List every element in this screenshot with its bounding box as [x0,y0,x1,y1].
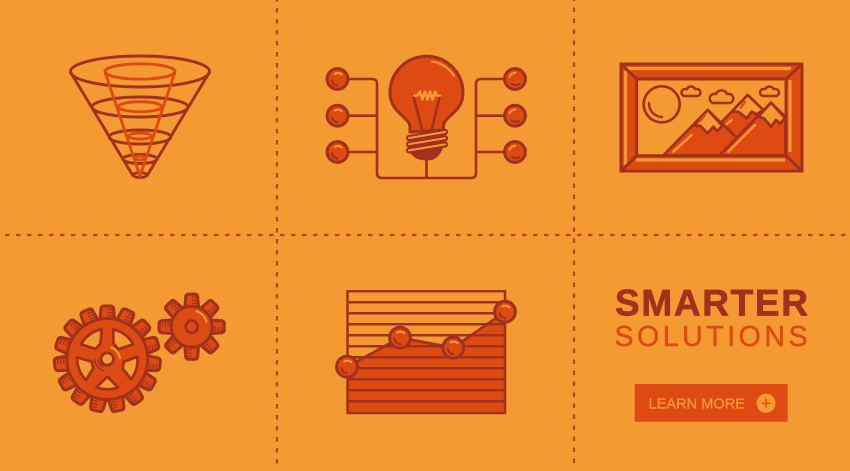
icon: framed landscape picture [621,64,802,171]
right nodes [500,64,530,167]
icon: light bulb circuit [327,56,530,178]
frame highlights [625,68,791,165]
heading: solutions: SOLUTIONS [614,321,808,353]
picture area [637,79,786,156]
large gear [54,306,161,412]
chart line [347,312,505,367]
mountain back [722,95,765,138]
small gear wheel [171,306,212,347]
icon: area line chart [337,291,515,413]
picture frame [621,64,802,171]
icon: gears [54,294,224,412]
icon: funnel [70,56,210,177]
mountain left [663,110,737,156]
small gear teeth [159,294,224,359]
screw threads [409,132,445,150]
icon: plus [756,394,776,413]
button label: LEARN MORE [648,397,745,413]
filament coil [414,92,440,100]
large gear wheel [67,318,148,400]
chart frame and stripes [348,291,505,413]
large gear glints [112,348,120,358]
funnel outer cone [70,56,210,177]
cloud middle [710,90,733,103]
data points [337,301,515,377]
large gear hub [101,353,114,365]
mountain right [719,103,786,156]
frame inner edge and mitres [621,64,802,171]
chart area [347,312,505,413]
heading: smarter: SMARTER [615,283,808,324]
left nodes [327,69,348,162]
bulb glint [432,62,454,76]
bulb base [408,141,444,160]
cloud left [682,87,701,96]
small gear glint [197,311,207,322]
button: learn more [635,384,788,422]
small gear hub [186,321,198,333]
filament supports [413,95,440,131]
cloud right [760,87,779,96]
sun [644,86,680,122]
button background [635,384,788,422]
bulb glass [390,56,463,132]
large gear teeth [54,306,161,412]
circuit wires [349,79,504,178]
small gear [159,294,224,359]
funnel inner cone [105,64,175,176]
large gear windows [77,329,138,389]
